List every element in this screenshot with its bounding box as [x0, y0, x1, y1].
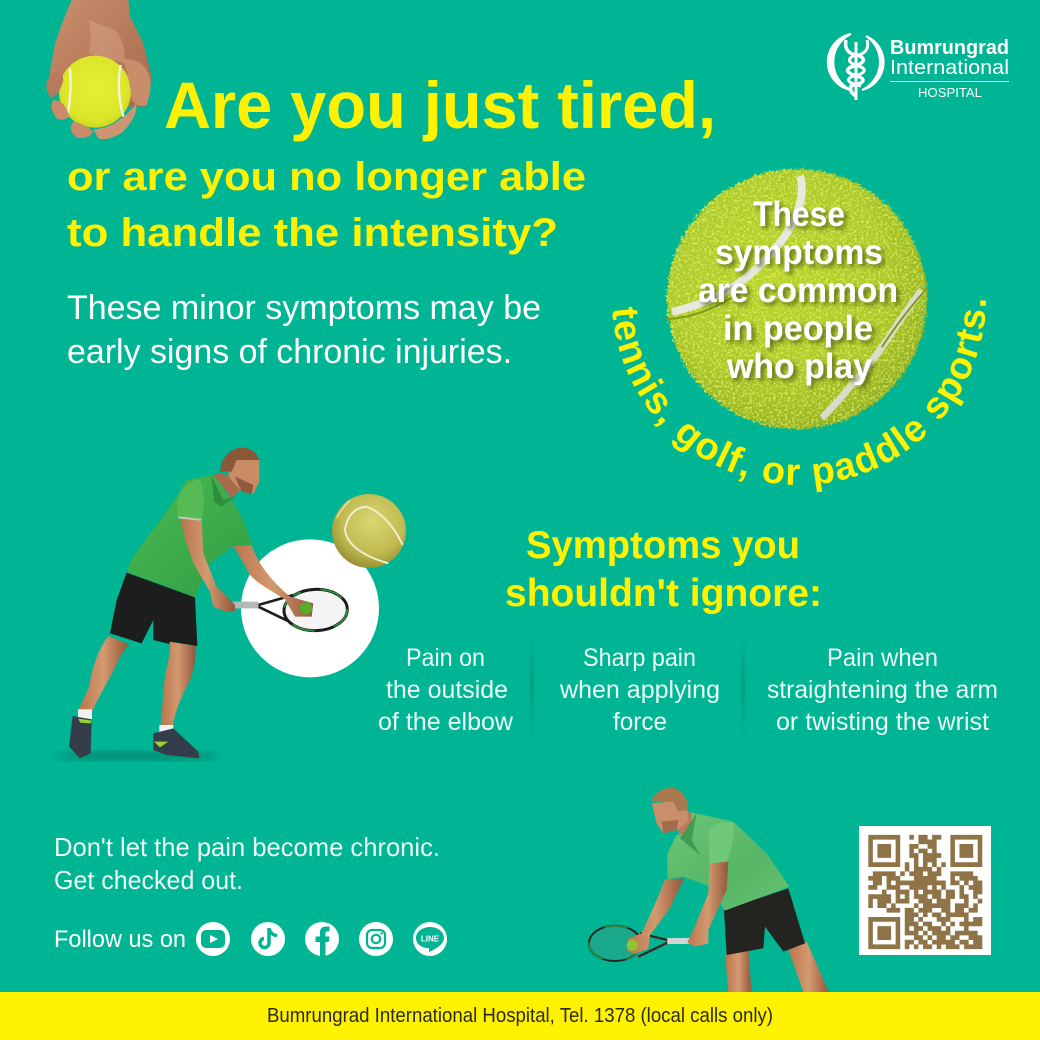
symptom 1: the outside — [386, 676, 508, 704]
icon: TikTok — [251, 922, 285, 956]
social row — [54, 922, 447, 956]
shorts — [110, 573, 197, 646]
far arm — [627, 878, 684, 954]
white circle — [241, 539, 379, 677]
title: main headline: to handle the intensity? — [67, 211, 558, 255]
panel: tennis ball with message — [612, 167, 986, 492]
polo shirt — [127, 475, 253, 597]
intro text block — [67, 289, 541, 371]
symptoms list — [378, 632, 998, 742]
symptom 3 — [767, 644, 998, 736]
footer bar — [0, 992, 1040, 1040]
logo wordmark: International — [890, 57, 1009, 79]
heading: symptoms: Symptoms you — [526, 524, 800, 567]
icon: YouTube — [196, 922, 230, 956]
call to action text: Get checked out. — [54, 865, 243, 895]
follow us label: Follow us on — [54, 926, 186, 953]
shorts — [724, 888, 805, 955]
curved caption: tennis, golf, or paddle sports. — [612, 300, 986, 492]
symptom 2 — [559, 644, 720, 736]
front leg — [161, 642, 196, 727]
polo shirt — [667, 812, 789, 911]
symptom 3: Pain when — [827, 644, 938, 672]
icon: LINE: LINE — [421, 934, 440, 944]
call to action text — [54, 832, 440, 895]
logo emblem — [828, 34, 884, 100]
photo: hand holding tennis ball — [46, 0, 152, 139]
heading: symptoms — [505, 524, 822, 615]
back legs — [725, 942, 829, 993]
photo: tennis player bending with racket — [589, 787, 829, 993]
far arm — [233, 545, 313, 617]
ball caption: in people — [723, 309, 873, 348]
ball in hand — [300, 602, 312, 615]
logo wordmark: Bumrungrad — [890, 37, 1009, 59]
ball caption: who play — [726, 347, 873, 386]
intro text block: early signs of chronic injuries. — [67, 333, 512, 371]
ground shadow — [53, 751, 220, 761]
socks and shoes — [69, 709, 199, 758]
symptom 2: when applying — [559, 676, 720, 704]
near arm — [687, 862, 728, 947]
intro text block: These minor symptoms may be — [67, 289, 541, 327]
logo wordmark — [890, 37, 1009, 100]
big fuzzy tennis ball — [666, 169, 928, 429]
ball in hand — [627, 940, 638, 951]
heading: symptoms: shouldn't ignore: — [505, 572, 822, 615]
title: main headline: Are you just tired, — [164, 68, 716, 142]
head and neck — [651, 787, 692, 838]
QR code — [859, 826, 991, 955]
call to action text: Don't let the pain become chronic. — [54, 832, 440, 862]
symptom 1 — [378, 644, 514, 736]
symptom 1: Pain on — [406, 644, 485, 672]
ball caption: These — [753, 195, 845, 234]
head and neck — [213, 447, 259, 498]
logo: Bumrungrad International Hospital — [828, 34, 1009, 100]
icon: LINE — [413, 922, 447, 956]
racket — [589, 926, 691, 961]
racket — [233, 588, 348, 632]
icon: Instagram — [359, 922, 393, 956]
symptom 2: force — [613, 708, 667, 736]
logo wordmark: HOSPITAL — [918, 85, 982, 100]
symptom 3: straightening the arm — [767, 676, 998, 704]
near arm — [180, 519, 235, 612]
symptom 2: Sharp pain — [583, 644, 696, 672]
photo: tennis player serving with white circle — [53, 447, 406, 761]
symptom 1: of the elbow — [378, 708, 514, 736]
title: main headline — [67, 68, 716, 255]
flying tennis ball — [332, 494, 406, 568]
ball caption — [698, 195, 898, 386]
ball caption: symptoms — [715, 233, 883, 272]
title: main headline: or are you no longer able — [67, 155, 586, 199]
ball caption: are common — [698, 271, 898, 310]
back leg — [78, 636, 128, 713]
symptom 3: or twisting the wrist — [776, 708, 989, 736]
footer bar: Bumrungrad International Hospital, Tel. 1378 (local calls only) — [267, 1005, 773, 1027]
icon: Facebook — [305, 922, 339, 956]
